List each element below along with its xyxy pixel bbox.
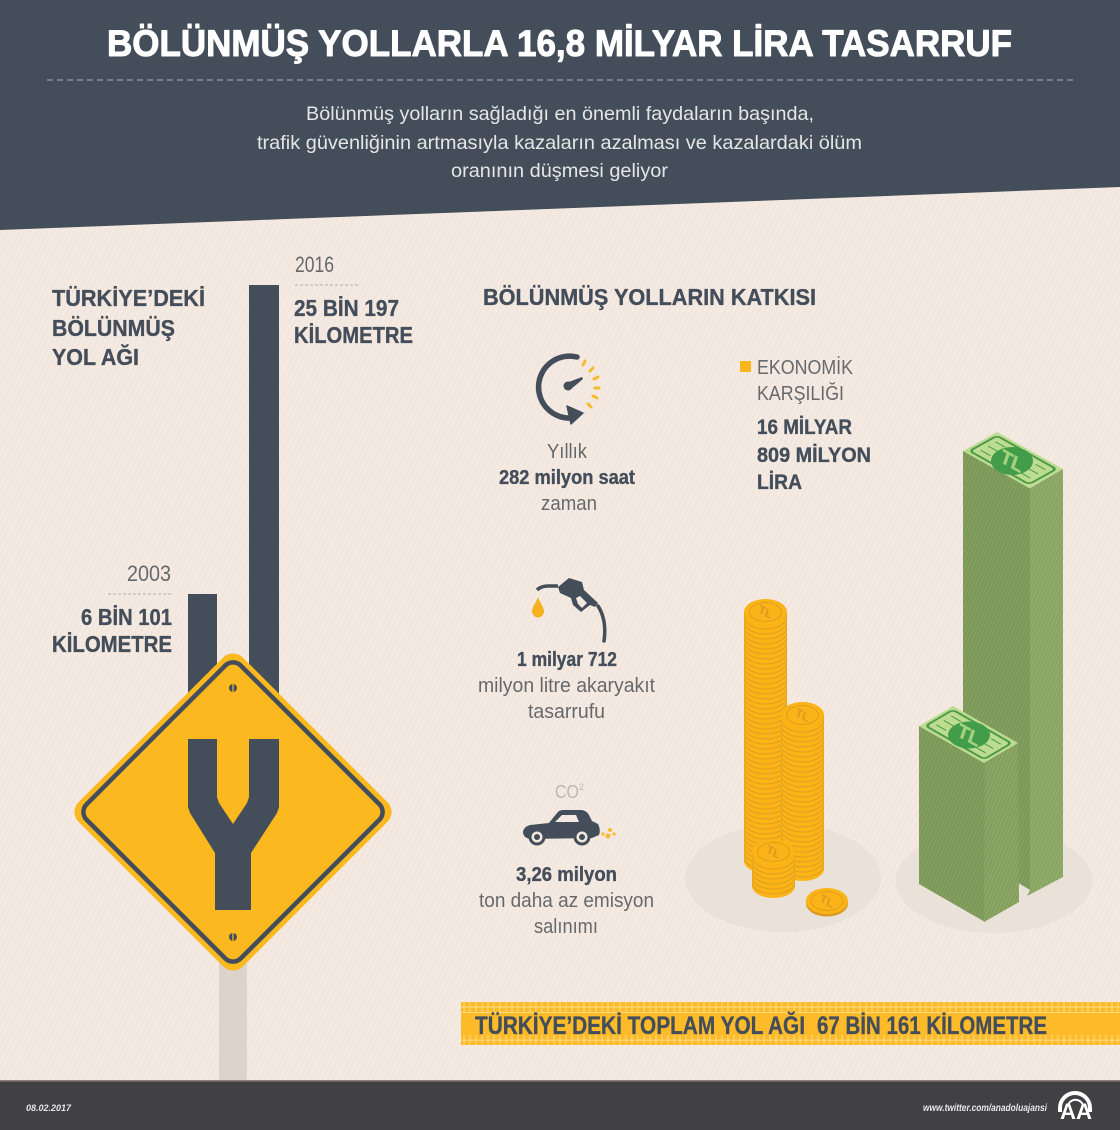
icon: car with CO2: 2 <box>579 782 584 792</box>
text: fuel saving: 1 milyar 712 <box>517 649 617 671</box>
intro text: Bölünmüş yolların sağladığı en önemli faydaların başında, <box>306 103 814 125</box>
label: 2003: 2003 <box>127 561 171 586</box>
total road network banner: TÜRKİYE’DEKİ TOPLAM YOL AĞI <box>475 1011 805 1040</box>
label: 2003: KİLOMETRE <box>52 631 172 657</box>
heading: road network: BÖLÜNMÜŞ <box>52 315 175 341</box>
heading: road network: TÜRKİYE’DEKİ <box>52 285 205 311</box>
label: 2016: 25 BİN 197 <box>294 295 399 321</box>
icon: car with CO2 <box>523 782 616 846</box>
banknote stack: tall: TL <box>998 446 1026 478</box>
text: fuel saving <box>478 649 655 723</box>
social link: www.twitter.com/anadoluajansi <box>923 1103 1047 1114</box>
banknote stack: short <box>919 706 1019 922</box>
date: 08.02.2017 <box>26 1103 72 1114</box>
label: 2003 <box>52 561 172 657</box>
legend: economic value: EKONOMİK <box>757 356 854 379</box>
icon: fuel pump nozzle <box>532 578 605 641</box>
intro text: oranının düşmesi geliyor <box>451 160 669 182</box>
legend: economic value: KARŞILIĞI <box>757 382 844 405</box>
text: time saving: Yıllık <box>547 441 588 463</box>
shadow: banknotes <box>896 829 1092 933</box>
banknote stack: short: TL <box>955 720 983 752</box>
banknote stack: tall <box>963 432 1063 896</box>
shadow: coins <box>685 824 881 932</box>
icon: divided road <box>188 739 279 910</box>
legend: economic value: 809 MİLYON <box>757 444 871 467</box>
label: 2016 <box>294 252 413 348</box>
coin stack: short: TL <box>765 843 782 862</box>
total road network banner <box>461 1002 1120 1045</box>
heading: road network: YOL AĞI <box>52 343 139 370</box>
single coin <box>806 888 848 916</box>
coin stack: short <box>752 839 795 898</box>
header panel <box>0 0 1120 230</box>
intro text <box>257 103 862 182</box>
label: 2016: KİLOMETRE <box>294 322 413 348</box>
single coin: TL <box>819 892 835 911</box>
legend: economic value: LİRA <box>757 471 802 494</box>
bar: 2003 <box>188 594 217 704</box>
text: fuel saving: tasarrufu <box>528 701 605 723</box>
label: 2003: 6 BİN 101 <box>81 604 172 630</box>
text: fuel saving: milyon litre akaryakıt <box>478 675 655 697</box>
text: time saving <box>499 441 635 515</box>
legend: economic value <box>740 356 871 494</box>
text: emission saving: 3,26 milyon <box>516 864 617 886</box>
coin stack: medium <box>781 702 824 881</box>
section heading: BÖLÜNMÜŞ YOLLARIN KATKISI <box>483 284 816 310</box>
coin stack: medium: TL <box>794 706 811 725</box>
bar: 2016 <box>249 285 279 705</box>
title: BÖLÜNMÜŞ YOLLARLA 16,8 MİLYAR LİRA TASARRUF <box>107 23 1012 64</box>
icon: car with CO2: CO <box>555 782 579 802</box>
coin stack: tall <box>744 599 787 873</box>
heading: road network <box>52 285 205 370</box>
footer <box>0 1080 1120 1130</box>
total road network banner: 67 BİN 161 KİLOMETRE <box>817 1012 1047 1040</box>
road sign <box>69 648 397 976</box>
legend: economic value: 16 MİLYAR <box>757 416 852 439</box>
text: emission saving: salınımı <box>534 916 598 938</box>
text: emission saving <box>479 864 654 938</box>
icon: stopwatch <box>539 356 599 424</box>
logo: Anadolu Agency: AA <box>1060 1099 1092 1124</box>
sign post <box>219 960 247 1081</box>
text: emission saving: ton daha az emisyon <box>479 890 654 912</box>
text: time saving: 282 milyon saat <box>499 467 635 489</box>
label: 2016: 2016 <box>295 252 334 277</box>
intro text: trafik güvenliğinin artmasıyla kazaların azalması ve kazalardaki ölüm <box>257 132 862 154</box>
text: time saving: zaman <box>541 493 597 515</box>
coin stack: tall: TL <box>757 603 774 622</box>
